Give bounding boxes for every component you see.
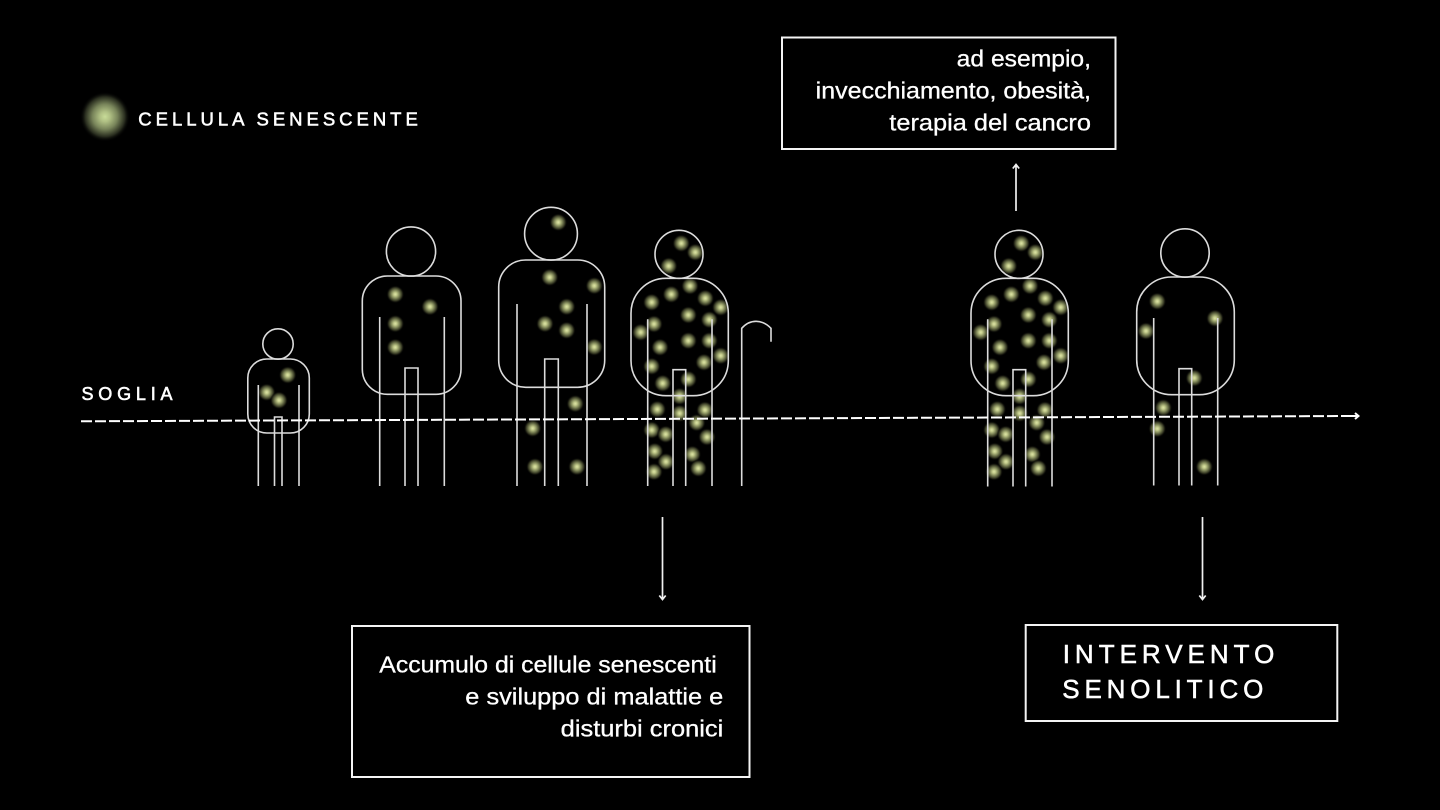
figure: elder with cane <box>631 230 771 486</box>
callout: senolytic intervention <box>1026 625 1337 721</box>
callout: causes examples: terapia del cancro <box>889 109 1091 135</box>
icon: cane <box>742 321 771 486</box>
callout: senolytic intervention: INTERVENTO <box>1063 639 1274 669</box>
threshold label: SOGLIA <box>82 384 172 404</box>
arrow: down to senolytic box <box>1199 517 1206 600</box>
callout: causes examples: ad esempio, <box>957 45 1091 71</box>
legend: senescent cell: CELLULA SENESCENTE <box>138 108 418 130</box>
figure: elder before intervention <box>971 230 1070 487</box>
arrow: up to examples box <box>1013 164 1019 211</box>
callout: accumulation of senescent cells: Accumulo di cellule senescenti <box>379 651 717 677</box>
figure: child <box>248 329 309 486</box>
callout: accumulation of senescent cells: disturbi cronici <box>561 715 723 741</box>
legend: senescent cell <box>80 92 418 142</box>
callout: accumulation of senescent cells <box>352 626 750 777</box>
figure: adult 1 <box>362 227 461 486</box>
callout: causes examples <box>782 38 1116 149</box>
figure: adult 2 <box>499 207 605 486</box>
figure: elder after intervention <box>1137 229 1234 486</box>
callout: senolytic intervention: SENOLITICO <box>1062 674 1263 704</box>
callout: accumulation of senescent cells: e sviluppo di malattie e <box>465 683 723 709</box>
arrow: down to accumulation box <box>659 517 666 600</box>
callout: causes examples: invecchiamento, obesità, <box>816 77 1091 103</box>
threshold dashed arrow <box>81 413 1358 421</box>
